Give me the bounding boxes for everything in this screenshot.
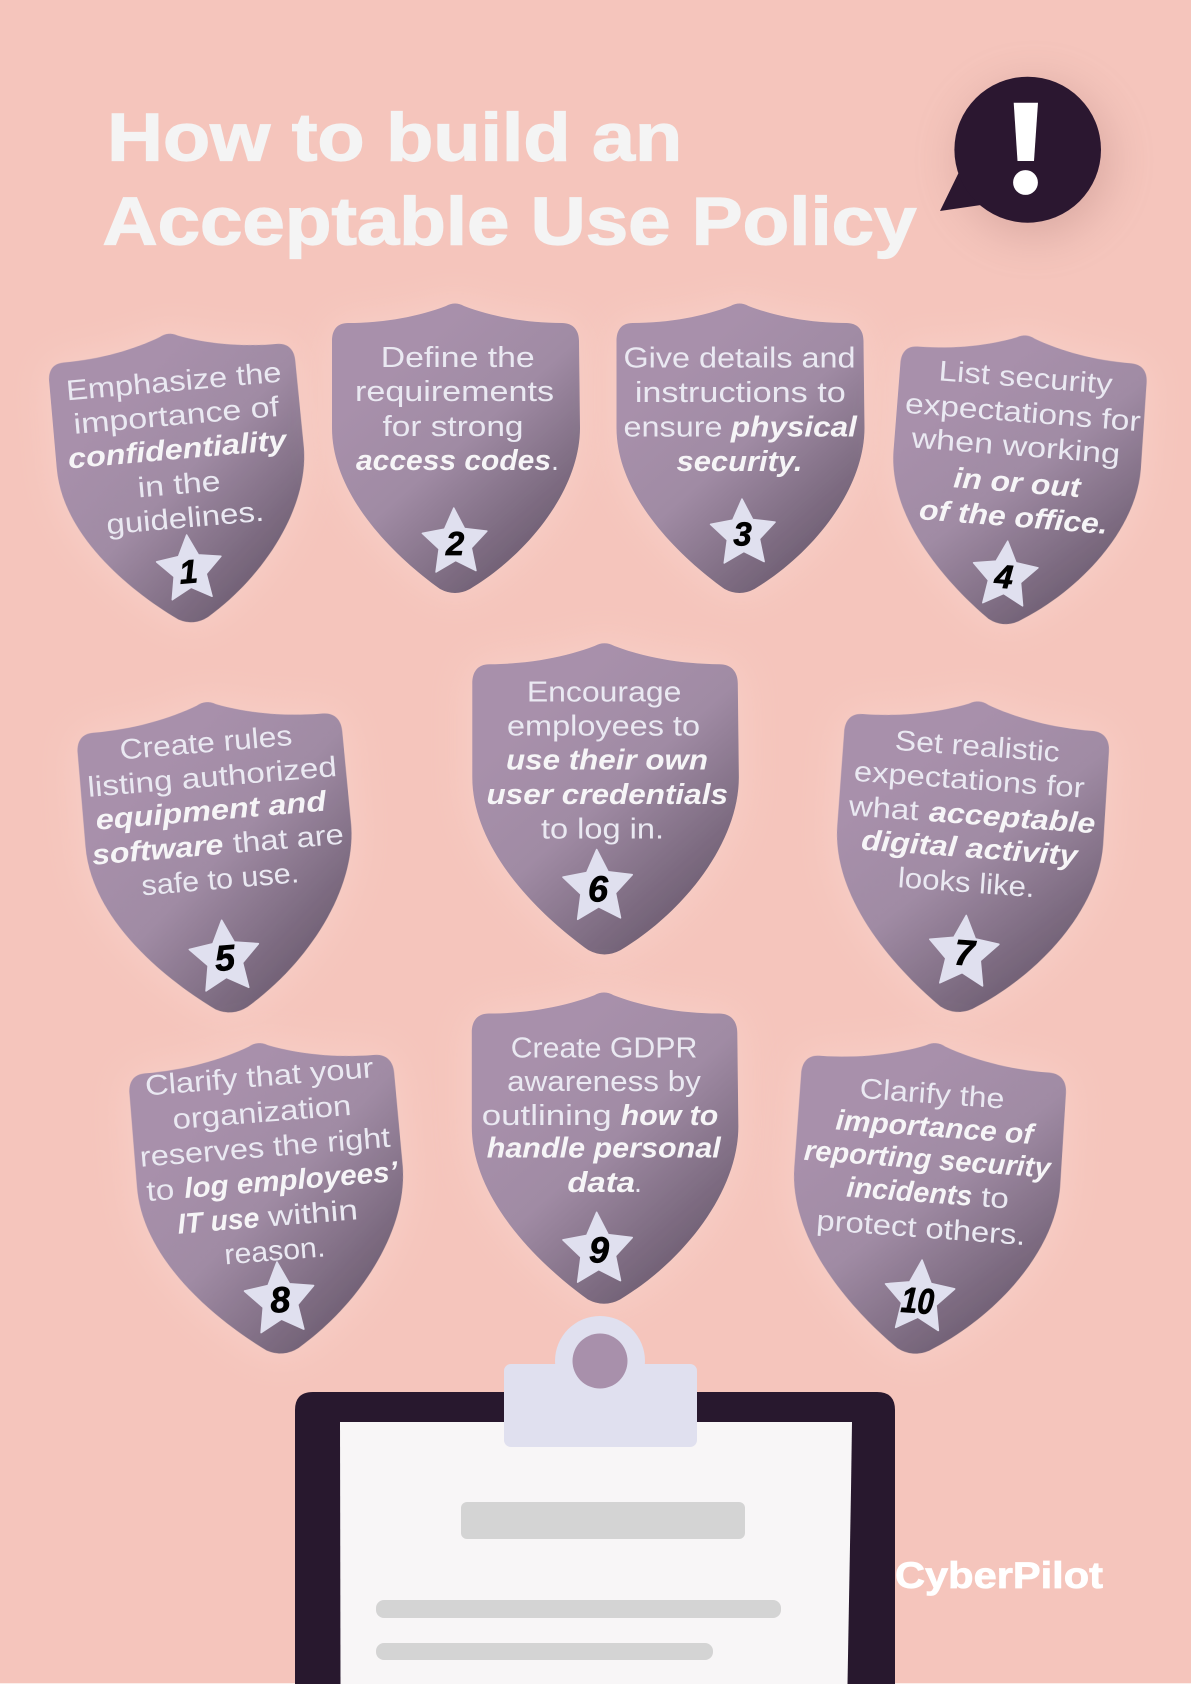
shield 8 text: to <box>145 1174 175 1208</box>
shield 4 text: in or out <box>952 462 1083 504</box>
shield 1 text: Emphasize the <box>65 357 283 407</box>
shield 9 text: awareness by <box>507 1066 702 1098</box>
star badge 9: 9 <box>589 1230 609 1271</box>
shield 9 body <box>472 993 738 1304</box>
star badge 8 <box>242 1259 317 1334</box>
shield 10 text: incidents <box>845 1172 973 1213</box>
shield 10 text: importance of <box>835 1105 1037 1151</box>
shield 7 text: what <box>847 790 920 827</box>
icon: speech bubble with exclamation mark <box>940 77 1108 234</box>
shield 1 text: in the <box>136 465 222 505</box>
clipboard board <box>295 1392 895 1684</box>
clipboard heading bar <box>461 1502 745 1539</box>
shield 2 text: . <box>551 445 559 477</box>
shield 4 text <box>896 353 1145 543</box>
shield 2 text: Define the <box>381 342 535 374</box>
shield 7 text: digital activity <box>860 825 1081 873</box>
shield 6 text: use their own <box>506 744 708 776</box>
shield 9 text: how to <box>621 1100 718 1132</box>
star badge 2 <box>421 507 488 572</box>
shield 5 text: software <box>91 829 225 872</box>
shield 8 text <box>133 1051 406 1278</box>
shield 2 text <box>355 342 559 477</box>
star badge 4 <box>970 539 1040 607</box>
shield 8 text: reserves the right <box>139 1122 392 1174</box>
star badge 3: 3 <box>733 516 752 553</box>
star badge 9 <box>562 1211 634 1283</box>
shield 3 text: instructions to <box>635 377 846 409</box>
title <box>102 100 917 260</box>
star badge 10 <box>882 1258 957 1331</box>
shield 2 body <box>332 304 580 593</box>
shield 7 text <box>842 722 1102 908</box>
shield 6 text <box>486 677 728 845</box>
shield 2 text: for strong <box>382 411 524 443</box>
shield 5 body <box>74 691 366 1023</box>
shield 3 text: ensure <box>624 412 722 444</box>
shield 10: reporting security incidents <box>781 1034 1070 1363</box>
shield 1 text: importance of <box>72 391 280 441</box>
shield 10 body <box>781 1034 1070 1363</box>
shield 1 text: guidelines. <box>105 496 265 541</box>
shield 9 text: Create GDPR <box>511 1032 697 1064</box>
shield 5 text: safe to use. <box>140 857 300 902</box>
shield 6 text: user credentials <box>486 779 728 811</box>
shield 6 text: Encourage <box>527 677 681 709</box>
shield 3 text: security. <box>676 446 802 478</box>
shield 6: own user credentials <box>472 643 739 954</box>
shield 3 text: Give details and <box>624 342 856 374</box>
shield 9 text: . <box>634 1167 642 1199</box>
shield 4 text: expectations for <box>904 388 1142 438</box>
shield 8 text: organization <box>171 1090 352 1136</box>
shield 9 text: data <box>567 1167 635 1199</box>
shield 7: acceptable digital activity <box>824 692 1113 1022</box>
shield 6 body <box>472 643 739 954</box>
shield 4 text: of the office. <box>918 494 1109 541</box>
star badge 2: 2 <box>445 525 465 562</box>
shield 7 body <box>824 692 1113 1022</box>
shield 8 text: within <box>266 1194 359 1234</box>
shield 9: GDPR personal data <box>472 993 738 1304</box>
star badge 6: 6 <box>588 869 609 910</box>
star badge 3 <box>710 498 776 563</box>
clipboard line 1 <box>376 1600 781 1618</box>
shield 7 text: Set realistic <box>894 725 1061 769</box>
star badge 5 <box>187 917 262 992</box>
star badge 7 <box>927 913 1001 987</box>
shield 7 text: expectations for <box>853 756 1086 805</box>
shield 2 text: access codes <box>356 445 551 477</box>
shield 2: access codes <box>332 304 580 593</box>
shield 5 text: listing authorized <box>86 751 338 804</box>
shield 2 text: requirements <box>355 376 554 408</box>
shield 10 text: reporting security <box>803 1135 1054 1185</box>
shield 8 text: IT use <box>176 1202 261 1241</box>
logo: CyberPilot: CyberPilot <box>895 1554 1104 1596</box>
shield 7 text: looks like. <box>897 862 1036 904</box>
shield 3 body <box>616 304 864 593</box>
shield 10 text: protect others. <box>815 1205 1027 1252</box>
shield 3: physical security <box>616 304 864 593</box>
shield 4 text: List security <box>938 355 1114 401</box>
shield 6 text: employees to <box>507 711 700 743</box>
shield 10 text: to <box>980 1181 1010 1215</box>
star badge 5: 5 <box>213 936 237 979</box>
shield 4 text: when working <box>909 422 1121 471</box>
shield 3 text <box>624 342 858 478</box>
shield 4: in or out of the office <box>881 326 1151 634</box>
star badge 8: 8 <box>268 1278 292 1321</box>
shield 4 body <box>881 326 1151 634</box>
shield 1: confidentiality <box>46 323 318 633</box>
star badge 7: 7 <box>953 931 978 974</box>
shield 9 text: outlining <box>482 1100 612 1132</box>
star badge 1 <box>154 532 224 601</box>
shield 8 text: log employees’ <box>183 1156 400 1205</box>
star badge 10: 10 <box>900 1279 936 1322</box>
shield 10 text <box>798 1069 1059 1254</box>
shield 9 text <box>482 1032 722 1199</box>
shield 5 text: Create rules <box>118 720 293 766</box>
shield 8: log employees IT use <box>126 1032 417 1364</box>
shield 7 text: acceptable <box>928 796 1097 840</box>
title: How to build an <box>107 100 682 176</box>
shield 1 text: confidentiality <box>67 424 290 475</box>
star badge 1: 1 <box>178 552 199 591</box>
shield 6 text: to log in. <box>541 813 664 845</box>
shield 8 text: reason. <box>223 1231 326 1271</box>
shield 3 text: physical <box>730 412 858 444</box>
shield 8 text: Clarify that your <box>144 1052 375 1102</box>
shield 5 text: that are <box>232 819 345 860</box>
star badge 4: 4 <box>992 557 1015 596</box>
shield 1 body <box>46 323 318 633</box>
shield 5: equipment and software <box>74 691 366 1023</box>
clipboard paper <box>340 1422 852 1684</box>
clipboard line 2 <box>376 1643 713 1660</box>
shield 5 text <box>82 716 348 906</box>
shield 10 text: Clarify the <box>859 1073 1006 1116</box>
shield 9 text: handle personal <box>487 1133 722 1165</box>
clipboard clip <box>504 1316 697 1447</box>
clipboard <box>295 1316 895 1684</box>
shield 5 text: equipment and <box>94 786 328 837</box>
title: Acceptable Use Policy <box>102 184 917 260</box>
shield 1 text <box>61 357 296 544</box>
shield 8 body <box>126 1032 417 1364</box>
star badge 6 <box>562 848 634 920</box>
